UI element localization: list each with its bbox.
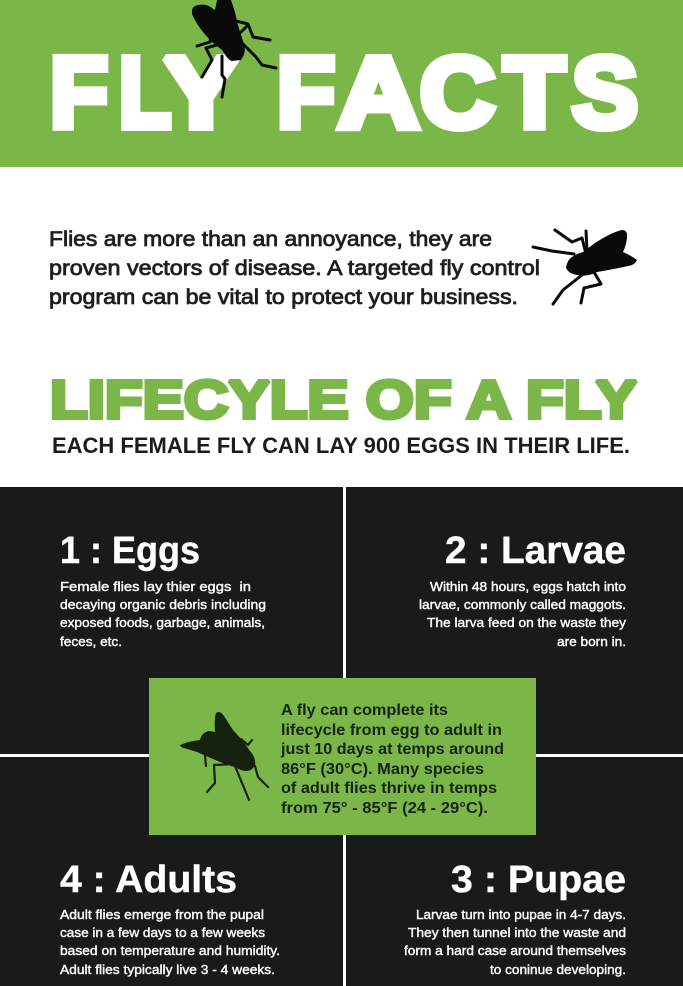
title	[50, 37, 638, 149]
icon: fly on title	[192, 0, 276, 97]
panel: 1 eggs	[60, 530, 266, 649]
callout	[149, 678, 536, 835]
callout text: A fly can complete its	[281, 702, 448, 719]
intro text: Flies are more than an annoyance, they are	[49, 227, 492, 251]
section heading: LIFECYLE OF A FLY	[50, 370, 637, 430]
panel: 2 larvae	[419, 530, 626, 649]
panel: 2 larvae: 2 : Larvae	[445, 530, 626, 572]
title: C	[420, 37, 495, 149]
panel: 3 pupae: to coninue developing.	[490, 962, 626, 977]
panel: 4 adults: Adult flies emerge from the pupal	[60, 907, 264, 922]
panel: 3 pupae: Larvae turn into pupae in 4-7 days.	[416, 907, 626, 922]
panel: 2 larvae: The larva feed on the waste they	[427, 615, 626, 630]
callout text: from 75° - 85°F (24 - 29°C).	[281, 800, 488, 817]
panel: 1 eggs: Female flies lay thier eggs in	[60, 579, 251, 594]
callout text: 86°F (30°C). Many species	[281, 761, 484, 778]
intro text: proven vectors of disease. A targeted fly control	[49, 256, 540, 280]
panel: 3 pupae	[404, 859, 626, 977]
title: A	[338, 37, 419, 149]
icon: fly in callout	[180, 712, 268, 800]
callout text: just 10 days at temps around	[280, 741, 504, 758]
panel: 4 adults: based on temperature and humidity.	[60, 943, 280, 958]
callout text	[280, 702, 504, 817]
panel: 3 pupae: 3 : Pupae	[451, 859, 626, 901]
title: F	[50, 37, 108, 149]
dark lifecycle panel	[0, 487, 683, 986]
icon: fly beside intro	[533, 230, 637, 304]
panel: 3 pupae: They then tunnel into the waste and	[408, 925, 626, 940]
panel: 4 adults: case in a few days to a few weeks	[60, 925, 265, 940]
panel: 3 pupae: form a hard case around themselves	[404, 943, 626, 958]
title: L	[119, 37, 171, 149]
title: S	[572, 37, 638, 149]
title: Y	[164, 37, 238, 149]
panel: 1 eggs: feces, etc.	[60, 634, 122, 649]
panel: 1 eggs: decaying organic debris including	[60, 597, 266, 612]
section subheading: EACH FEMALE FLY CAN LAY 900 EGGS IN THEIR LIFE.	[52, 433, 630, 458]
intro text	[49, 227, 540, 309]
panel: 1 eggs: exposed foods, garbage, animals,	[60, 615, 265, 630]
panel: 2 larvae: larvae, commonly called maggots.	[419, 597, 626, 612]
callout text: of adult flies thrive in temps	[281, 780, 497, 797]
title: F	[277, 37, 335, 149]
panel: 1 eggs: 1 : Eggs	[60, 530, 200, 572]
panel: 4 adults	[60, 859, 280, 977]
panel: 2 larvae: are born in.	[557, 634, 626, 649]
intro text: program can be vital to protect your business.	[49, 285, 518, 309]
title: T	[504, 37, 565, 149]
header band	[0, 0, 683, 167]
panel: 4 adults: Adult flies typically live 3 - 4 weeks.	[60, 962, 275, 977]
callout text: lifecycle from egg to adult in	[281, 722, 502, 739]
panel: 2 larvae: Within 48 hours, eggs hatch into	[430, 579, 626, 594]
panel: 4 adults: 4 : Adults	[60, 859, 237, 901]
